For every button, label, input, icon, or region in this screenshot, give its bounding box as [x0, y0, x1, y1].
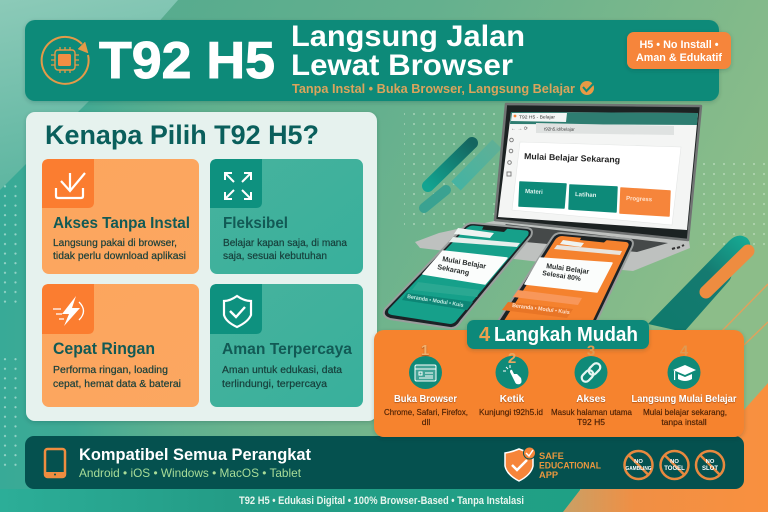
card: fleksibel: saja, sesuai kebutuhan — [223, 251, 327, 262]
badge: no gambling: GAMBLING — [626, 466, 652, 472]
tile: progress — [620, 188, 670, 216]
footer text: T92 H5 • Edukasi Digital • 100% Browser-Based • Tanpa Instalasi — [239, 495, 524, 507]
icon: lightning — [53, 296, 84, 326]
phone nav — [402, 293, 473, 310]
badge: no togel: NO — [670, 459, 679, 465]
badge: no slot: SLOT — [702, 466, 718, 472]
step 4: 4 — [680, 342, 689, 360]
decorative diagonal pills — [424, 143, 497, 208]
step 4: Langsung Mulai Belajar — [632, 394, 737, 405]
icon: tap hand — [503, 365, 522, 384]
card: cepat ringan: cepat, hemat data & baterai — [53, 379, 181, 390]
tile: materi — [519, 182, 566, 208]
badge: no gambling: NO — [634, 459, 643, 465]
badge: no togel — [660, 451, 688, 479]
card: fleksibel: Belajar kapan saja, di mana — [223, 238, 347, 249]
phone: orange: Selesai 80% — [542, 270, 581, 283]
icon: link — [580, 362, 602, 383]
step 1: dll — [422, 417, 430, 427]
icon: shield check — [224, 296, 251, 327]
step 3: T92 H5 — [577, 417, 605, 427]
laptop screen bezel — [495, 104, 701, 240]
step 4: Mulai belajar sekarang, — [643, 407, 727, 417]
phone: orange — [489, 233, 633, 335]
safe educational text: APP — [539, 470, 558, 480]
icon: download — [56, 173, 85, 198]
bottom bar: compatibility: Kompatibel Semua Perangkat — [79, 446, 311, 464]
card: fleksibel: Fleksibel — [223, 215, 288, 232]
laptop: t92h5.id/belajar — [544, 127, 575, 132]
card: akses tanpa instal: Langsung pakai di browser, — [53, 238, 177, 249]
laptop base — [415, 221, 690, 271]
card: aman terpercaya — [210, 284, 363, 407]
step 2: Ketik — [500, 394, 525, 405]
laptop: Mulai Belajar Sekarang — [524, 151, 620, 165]
card: aman terpercaya: Aman untuk edukasi, data — [222, 365, 342, 376]
icon: check — [580, 81, 596, 95]
bottom bar: compatibility: Android • iOS • Windows • MacOS • Tablet — [79, 466, 302, 480]
step 1 — [384, 342, 468, 427]
card: cepat ringan: Performa ringan, loading — [53, 365, 168, 376]
safe educational text — [539, 451, 601, 480]
icon: tablet — [45, 449, 65, 477]
step 3: 3 — [587, 342, 595, 360]
brand title: T92 H5 — [99, 32, 275, 90]
header banner — [25, 20, 731, 101]
safe educational text: EDUCATIONAL — [539, 460, 601, 470]
icon: expand arrows — [225, 173, 251, 199]
title pill: 4 — [479, 324, 491, 346]
phone: orange: Mulai Belajar — [546, 263, 590, 276]
safe educational text: SAFE — [539, 451, 564, 461]
badge: no slot — [696, 451, 724, 479]
step 1: Chrome, Safari, Firefox, — [384, 407, 468, 417]
card: cepat ringan: Cepat Ringan — [53, 340, 155, 358]
phone card — [525, 258, 612, 292]
tile: progress: Progress — [626, 196, 653, 203]
phone: teal — [384, 223, 532, 328]
card: akses tanpa instal — [42, 159, 199, 274]
content card — [512, 142, 681, 225]
badge: no gambling — [624, 451, 652, 479]
phone nav — [502, 302, 573, 318]
laptop: T92 H5 - Belajar — [519, 114, 556, 120]
decorative band right — [648, 236, 768, 345]
icon: safe shield — [505, 447, 536, 481]
badge: H5 • No Install • — [640, 39, 719, 51]
bottom bar: compatibility — [25, 436, 744, 489]
step 4 — [632, 342, 737, 427]
phone: orange: Beranda • Modul • Kuis — [512, 303, 570, 316]
step 3 — [551, 342, 632, 427]
laptop — [415, 104, 701, 271]
phone card — [423, 251, 507, 284]
headline — [291, 20, 525, 82]
title pill — [467, 320, 649, 349]
phone: teal: Mulai Belajar — [442, 254, 487, 271]
panel: 4 steps — [374, 320, 744, 437]
card: akses tanpa instal: Akses Tanpa Instal — [53, 215, 190, 232]
step 3: Akses — [576, 394, 606, 405]
tile: materi: Materi — [525, 189, 543, 196]
card: fleksibel — [210, 159, 363, 274]
browser window — [498, 112, 698, 230]
icon: browser — [415, 365, 436, 381]
heading: Kenapa Pilih T92 H5? — [45, 120, 319, 150]
tile: latihan — [569, 185, 617, 212]
card: akses tanpa instal: tidak perlu download aplikasi — [53, 251, 186, 262]
step 1: Buka Browser — [394, 394, 457, 405]
card: aman terpercaya: terlindungi, terpercaya — [222, 379, 327, 390]
step 2 — [479, 350, 543, 417]
card: aman terpercaya: Aman Terpercaya — [222, 341, 352, 358]
step 1: 1 — [421, 342, 429, 359]
laptop: ← → ⟳ — [511, 126, 529, 132]
tile: latihan: Latihan — [575, 192, 597, 199]
badge: no togel: TOGEL — [664, 466, 685, 472]
icon: graduation cap — [673, 365, 696, 381]
step 2: Kunjungi t92h5.id — [479, 407, 543, 417]
step 4: tanpa install — [661, 417, 707, 427]
badge: Aman & Edukatif — [636, 52, 722, 64]
icon: chip with circular arrow — [42, 37, 89, 84]
step 2: 2 — [508, 350, 516, 367]
title pill: Langkah Mudah — [494, 324, 638, 346]
badge — [627, 32, 731, 69]
tagline: Tanpa Instal • Buka Browser, Langsung Belajar — [292, 81, 575, 96]
address bar — [536, 123, 674, 135]
headline: Langsung Jalan — [291, 20, 525, 53]
step 3: Masuk halaman utama — [551, 407, 632, 417]
card: cepat ringan — [42, 284, 199, 407]
panel: why choose — [26, 112, 377, 421]
sidebar icons — [507, 138, 513, 176]
phone: teal: Beranda • Modul • Kuis — [407, 294, 464, 309]
phone: teal: Sekarang — [437, 262, 470, 277]
badge: no slot: NO — [706, 459, 715, 465]
headline: Lewat Browser — [291, 49, 514, 82]
